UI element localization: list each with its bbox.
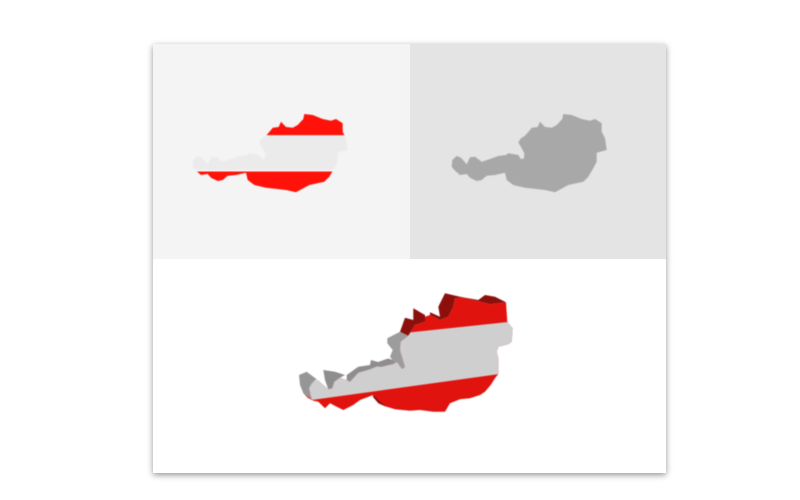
panel: grey map background — [410, 44, 666, 259]
flag bands on front face — [308, 296, 514, 413]
card: map collection — [153, 44, 666, 473]
panel: flag map background — [153, 44, 410, 259]
extruded side: dark red north wall — [430, 293, 506, 320]
extruded side: grey central wall — [323, 370, 345, 389]
map: 3D extruded Austria in flag colours — [298, 292, 514, 413]
map: flat Austria in grey — [452, 114, 607, 192]
extruded side: dark red west wall — [400, 308, 425, 336]
extruded side: lower dark red wall — [373, 390, 387, 407]
illustration: three Austria maps — [153, 44, 666, 413]
map: flat Austria in flag colours — [194, 113, 346, 193]
extruded side: grey northern wall — [387, 332, 408, 370]
extruded side: grey western wall — [299, 372, 317, 399]
extruded side: red south-west edge — [303, 393, 318, 402]
extruded side: grey alpine wall — [347, 358, 397, 382]
